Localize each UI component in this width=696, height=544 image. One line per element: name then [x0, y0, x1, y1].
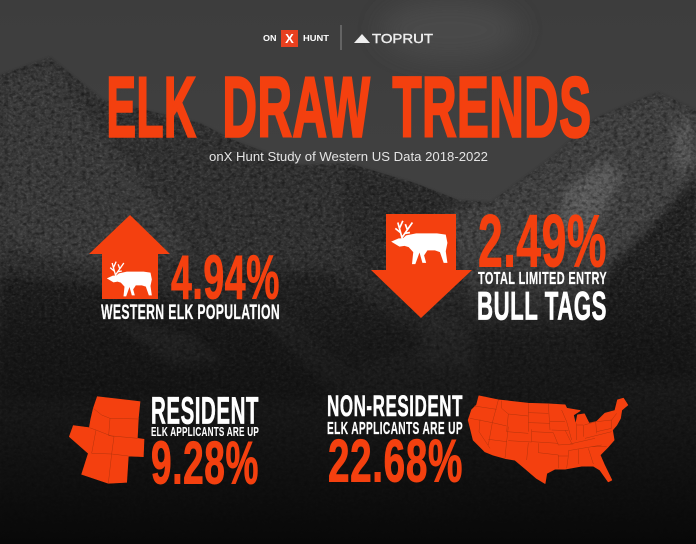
value: 22.68% [328, 428, 463, 494]
label: ELK APPLICANTS ARE UP [151, 424, 259, 439]
subtitle: onX Hunt Study of Western US Data 2018-2022 [209, 150, 488, 164]
label: ELK APPLICANTS ARE UP [327, 418, 463, 438]
title: DRAW [222, 60, 370, 156]
logo: onX Hunt: X [285, 31, 294, 46]
stat: resident applicants [69, 390, 259, 496]
logo: Toprut: TOPRUT [372, 31, 433, 46]
logo: onX Hunt: ON [263, 33, 276, 43]
logo: Toprut [354, 31, 433, 46]
label: WESTERN ELK POPULATION [101, 300, 280, 324]
title: ELK [106, 60, 196, 156]
value: 9.28% [151, 430, 259, 496]
stat: western elk population [89, 215, 280, 324]
value: 4.94% [171, 244, 280, 312]
label: RESIDENT [151, 390, 259, 432]
value: 2.49% [478, 200, 607, 282]
title [106, 60, 592, 156]
stat: non-resident applicants [327, 390, 628, 494]
label: TOTAL LIMITED ENTRY [478, 268, 607, 288]
icon: up arrow with elk [89, 215, 170, 299]
stat: bull tags [371, 200, 607, 328]
map: western states [69, 397, 144, 483]
label: NON-RESIDENT [327, 390, 463, 423]
logo: onX Hunt [263, 30, 330, 47]
logo lockup [263, 25, 433, 50]
icon: down arrow with elk [371, 214, 472, 318]
logo: onX Hunt: HUNT [303, 33, 330, 43]
map: United States [468, 396, 628, 483]
